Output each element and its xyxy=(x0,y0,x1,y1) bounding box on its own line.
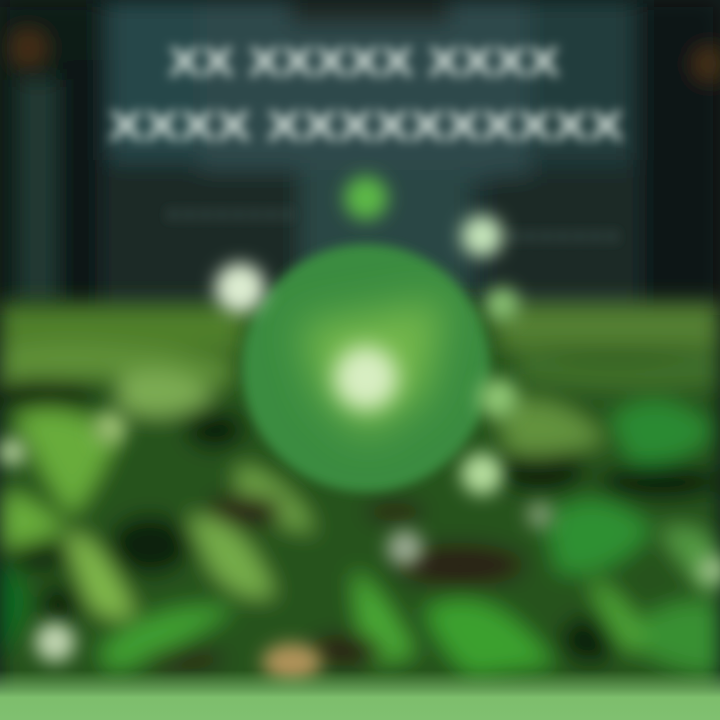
dark gaps xyxy=(0,379,720,664)
title text: XX XXXXX XXXX xyxy=(168,38,560,85)
subtitle text: XXXXXXXX xyxy=(165,207,295,224)
dark background top xyxy=(0,0,720,315)
central green circle diagram xyxy=(215,176,519,495)
soil patches xyxy=(145,494,525,670)
subtitle text xyxy=(165,207,621,246)
upper hedge rows xyxy=(0,302,720,389)
satellite nodes xyxy=(215,176,519,495)
title text xyxy=(108,38,624,149)
bottom light green band xyxy=(0,670,720,720)
subtitle text: XXXXXXX xyxy=(505,229,621,246)
foliage field xyxy=(0,302,720,700)
title text: XXXX XXXXXXXXXX xyxy=(108,102,624,149)
glowing center node xyxy=(334,346,398,410)
highlights among leaves xyxy=(0,411,720,681)
leaves xyxy=(0,371,720,675)
